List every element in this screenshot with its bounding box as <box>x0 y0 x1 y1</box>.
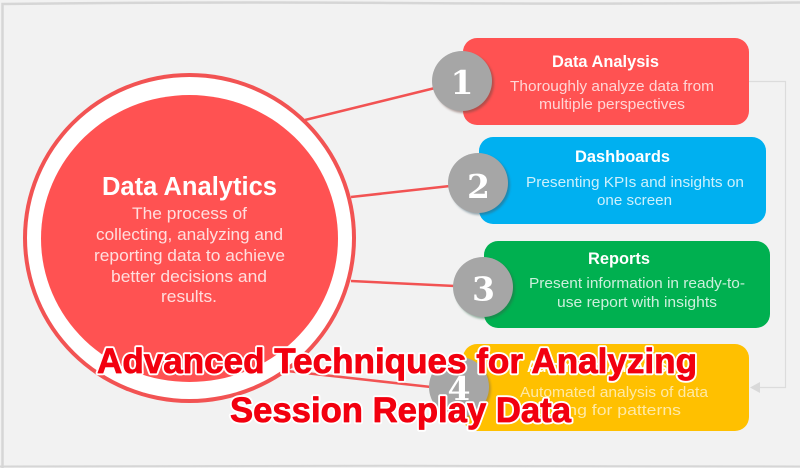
card 1: Data Analysis: Data Analysis <box>552 53 659 71</box>
badge 2 <box>448 153 510 215</box>
card 4: Automation: looking for patterns <box>531 402 681 419</box>
circle description: better decisions and <box>111 267 267 286</box>
connector: circle to badge 4 <box>287 371 431 387</box>
title: Session Replay Data <box>230 391 572 430</box>
circle description: collecting, analyzing and <box>96 225 283 244</box>
connector: flow line to card 4 <box>749 82 786 393</box>
circle heading: Data Analytics <box>102 173 277 201</box>
card 3: Reports: use report with insights <box>557 294 717 311</box>
title <box>97 342 697 430</box>
badge 4: 4 <box>448 369 470 408</box>
central circle: Data Analytics <box>23 73 356 403</box>
card 4: Automation: Automated analysis of data <box>520 384 709 401</box>
circle description: results. <box>161 287 217 306</box>
connector: circle to badge 1 <box>305 88 435 120</box>
card 1: Data Analysis <box>463 38 749 125</box>
card 3: Reports <box>484 241 770 328</box>
card 3: Reports: Reports <box>588 250 650 268</box>
badge 1: 1 <box>451 63 473 102</box>
card 1: Data Analysis: Thoroughly analyze data from <box>510 78 714 95</box>
card 4: Automation: Automated Analysis <box>527 358 667 376</box>
card 1: Data Analysis: multiple perspectives <box>539 96 685 113</box>
card 2: Dashboards: Dashboards <box>575 148 670 166</box>
connector: circle to badge 2 <box>351 186 450 197</box>
connector: circle to badge 3 <box>351 281 455 286</box>
card 3: Reports: Present information in ready-to- <box>529 275 745 292</box>
card 2: Dashboards: one screen <box>597 192 672 209</box>
circle description <box>94 204 285 306</box>
badge 2: 2 <box>467 167 490 206</box>
circle description: reporting data to achieve <box>94 246 285 265</box>
circle description: The process of <box>132 204 247 223</box>
badge 3: 3 <box>472 270 495 308</box>
title: Advanced Techniques for Analyzing <box>97 342 697 381</box>
title: Session Replay Data <box>230 391 572 430</box>
badge 1 <box>432 51 494 113</box>
badge 4 <box>429 357 491 419</box>
card 4: Automation <box>463 344 749 431</box>
card 2: Dashboards <box>479 137 766 224</box>
card 2: Dashboards: Presenting KPIs and insights on <box>526 174 744 191</box>
title: Advanced Techniques for Analyzing <box>97 342 697 381</box>
badge 3 <box>453 257 515 319</box>
